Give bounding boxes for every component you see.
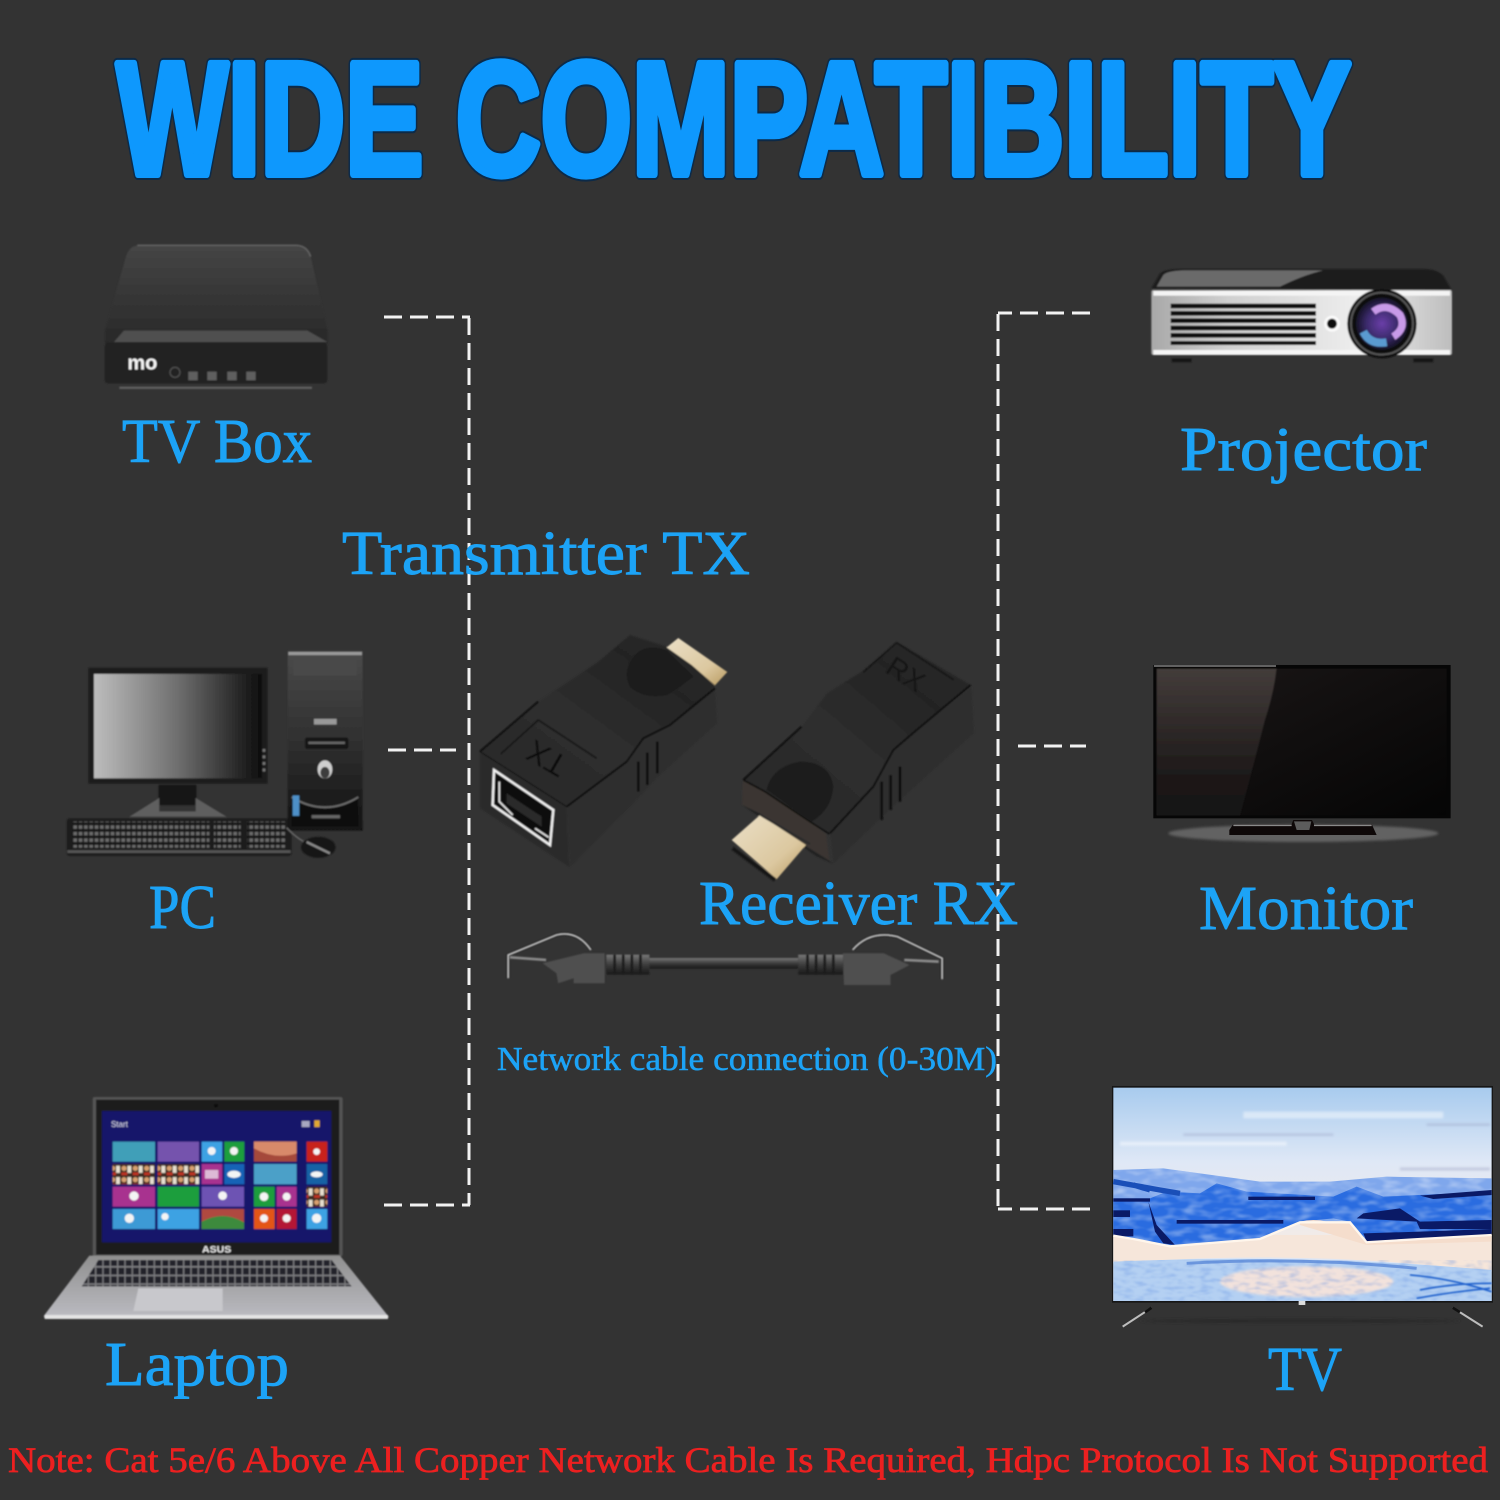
tower	[288, 651, 363, 831]
note: requirement warning: Note: Cat 5e/6 Above All Copper Network Cable Is Required, Hdpc Protocol Is Not Supported	[8, 1440, 1488, 1480]
label: Transmitter TX: Transmitter TX	[342, 520, 750, 588]
laptop lid: ASUS	[202, 1244, 231, 1254]
laptop lid: Start	[111, 1120, 129, 1129]
icon: TX connector	[480, 635, 727, 867]
label: Receiver RX: Receiver RX	[699, 870, 1018, 938]
icon: TX connector: TX	[520, 733, 573, 784]
laptop lid	[93, 1097, 343, 1256]
right dashed connector	[998, 313, 1090, 1209]
tv water	[1113, 1235, 1492, 1301]
label: Monitor: Monitor	[1199, 875, 1413, 943]
icon: network cable	[508, 934, 942, 985]
left dashed connector	[384, 317, 470, 1205]
keyboard	[67, 818, 292, 856]
icon: projector	[1151, 269, 1452, 362]
icon: TV box	[105, 245, 328, 389]
label: Projector: Projector	[1180, 416, 1427, 484]
label: Laptop: Laptop	[105, 1331, 289, 1399]
monitor	[88, 668, 268, 817]
label: TV: TV	[1268, 1336, 1342, 1404]
label: network cable connection: Network cable connection (0-30M)	[497, 1041, 997, 1078]
laptop base	[44, 1256, 389, 1319]
label: TV Box: TV Box	[122, 408, 312, 476]
icon: TV	[1112, 1086, 1493, 1327]
mouse	[287, 828, 336, 858]
icon: TV box: mo	[127, 352, 157, 374]
icon: laptop	[44, 1097, 389, 1319]
tv mountains	[1113, 1168, 1492, 1247]
icon: monitor	[1153, 665, 1451, 842]
label: PC: PC	[149, 874, 216, 942]
icon: desktop PC	[67, 651, 363, 858]
icon: RX connector	[732, 642, 974, 880]
icon: RX connector: RX	[880, 651, 931, 699]
